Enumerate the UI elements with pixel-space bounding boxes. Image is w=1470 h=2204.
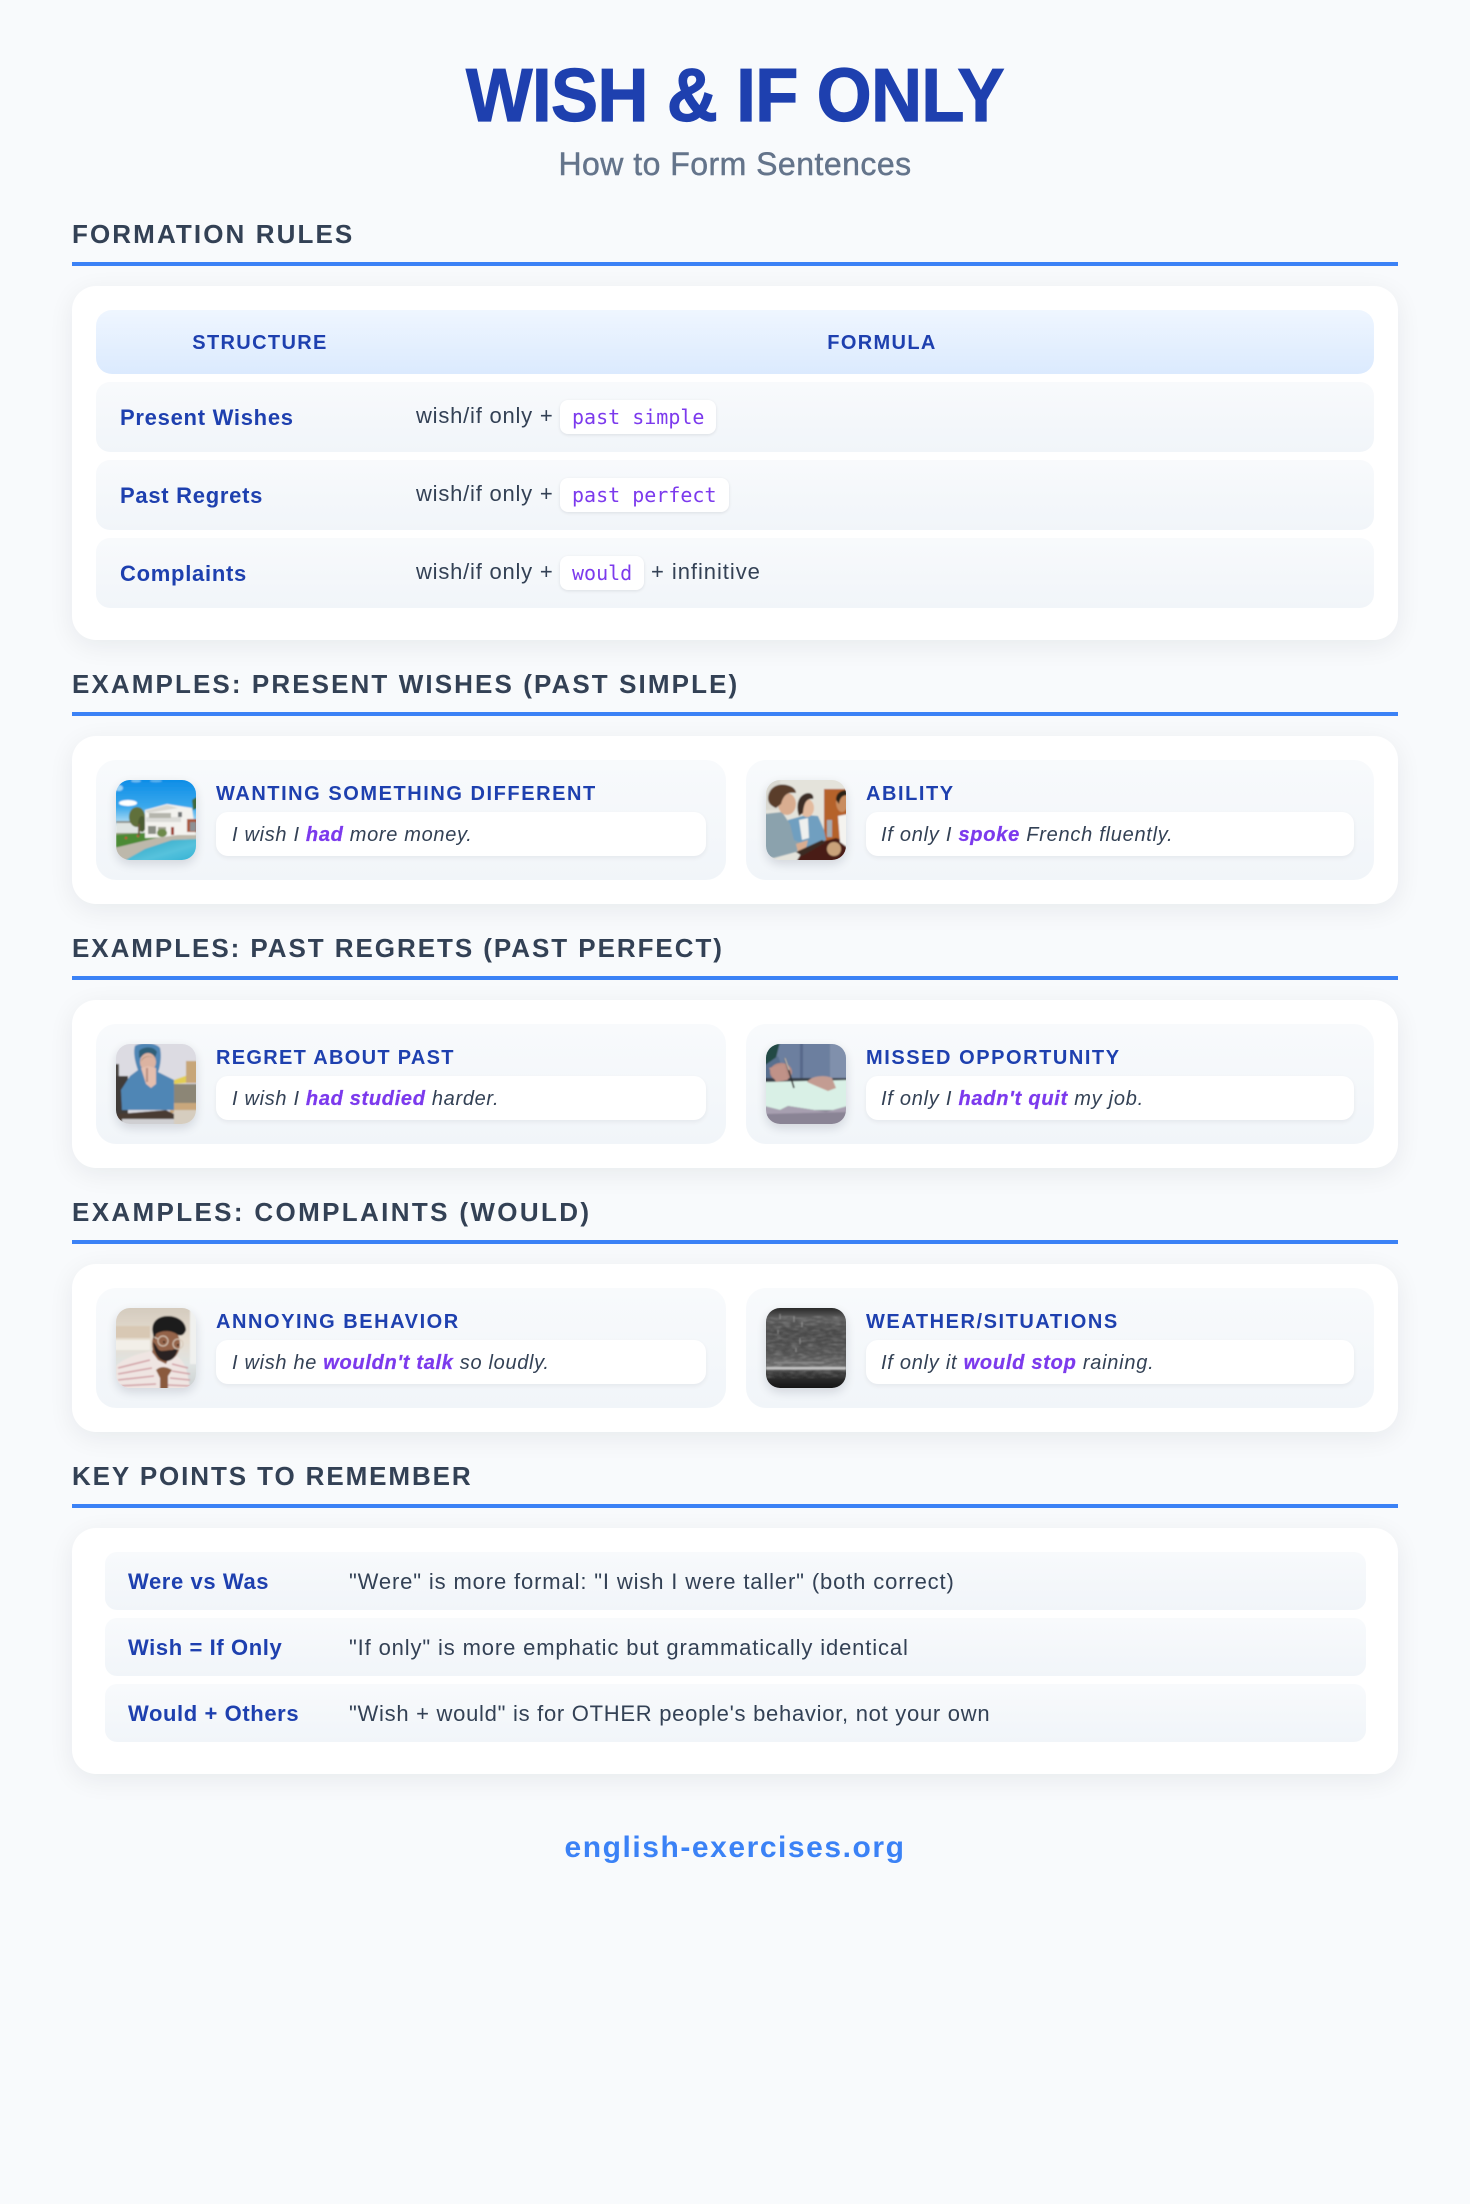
example sentence: If only I spoke French fluently. [881,824,1173,846]
row: past regrets: wish/if only + [416,481,553,506]
key point: would + others: "Wish + would" is for OTHER people's behavior, not your own [349,1701,990,1726]
row: past regrets: past perfect [572,483,716,507]
row: complaints: would [572,561,632,585]
card label: ABILITY [866,783,955,805]
icon: annoyed man photo [116,1308,196,1388]
panel: formation rules table [72,286,1398,640]
table header: STRUCTURE [192,332,328,354]
card label: WEATHER/SITUATIONS [866,1311,1119,1333]
card: missed opportunity [746,1024,1374,1144]
table header: FORMULA [827,332,937,354]
example sentence [216,1076,706,1120]
table header [96,310,1374,374]
panel: complaints examples [72,1264,1398,1432]
key point: wish = if only [105,1618,1366,1676]
section heading: formation rules [72,219,1398,266]
row: complaints [96,538,1374,608]
card label: MISSED OPPORTUNITY [866,1047,1121,1069]
key point: were vs was: "Were" is more formal: "I wish I were taller" (both correct) [349,1569,955,1594]
icon: rain photo [766,1308,846,1388]
subtitle: How to Form Sentences [558,146,912,182]
key point: wish = if only: "If only" is more emphatic but grammatically identical [349,1635,909,1660]
card label: ANNOYING BEHAVIOR [216,1311,460,1333]
panel: key points [72,1528,1398,1774]
section heading: formation rules: FORMATION RULES [72,219,354,249]
section heading: complaints [72,1197,1398,1244]
row: present wishes: past simple [572,405,704,429]
example sentence [866,812,1354,856]
icon: house with pool photo [116,780,196,860]
row: complaints: wish/if only + [416,559,553,584]
row: past regrets: Past Regrets [120,483,263,508]
row: complaints: + infinitive [651,559,761,584]
key point: were vs was [105,1552,1366,1610]
panel: past regrets examples [72,1000,1398,1168]
key point: wish = if only: Wish = If Only [128,1635,282,1660]
example sentence: I wish I had studied harder. [232,1088,499,1110]
section heading: past regrets: EXAMPLES: PAST REGRETS (PAST PERFECT) [72,933,724,963]
row: present wishes: wish/if only + [416,403,553,428]
icon: regretful person photo [116,1044,196,1124]
row: present wishes [96,382,1374,452]
section heading: key points: KEY POINTS TO REMEMBER [72,1461,473,1491]
key point: would + others: Would + Others [128,1701,299,1726]
title: WISH & IF ONLY [466,53,1004,137]
row: past regrets [96,460,1374,530]
example sentence: I wish I had more money. [232,824,472,846]
section heading: present wishes [72,669,1398,716]
row: present wishes: Present Wishes [120,405,294,430]
icon: signing paper photo [766,1044,846,1124]
card: ability [746,760,1374,880]
card: regret about past [96,1024,726,1144]
example sentence [216,812,706,856]
example sentence: I wish he wouldn't talk so loudly. [232,1352,550,1374]
icon: people studying photo [766,780,846,860]
footer website: english-exercises.org [564,1831,906,1864]
card label: WANTING SOMETHING DIFFERENT [216,783,597,805]
card: wanting something different [96,760,726,880]
card label: REGRET ABOUT PAST [216,1047,455,1069]
section heading: key points [72,1461,1398,1508]
example sentence [866,1340,1354,1384]
section heading: past regrets [72,933,1398,980]
row: complaints: Complaints [120,561,247,586]
card: annoying behavior [96,1288,726,1408]
example sentence [866,1076,1354,1120]
section heading: present wishes: EXAMPLES: PRESENT WISHES (PAST SIMPLE) [72,669,739,699]
card: weather/situations [746,1288,1374,1408]
key point: would + others [105,1684,1366,1742]
section heading: complaints: EXAMPLES: COMPLAINTS (WOULD) [72,1197,591,1227]
example sentence: If only I hadn't quit my job. [881,1088,1144,1110]
key point: were vs was: Were vs Was [128,1569,269,1594]
example sentence [216,1340,706,1384]
example sentence: If only it would stop raining. [881,1352,1154,1374]
panel: present wishes examples [72,736,1398,904]
